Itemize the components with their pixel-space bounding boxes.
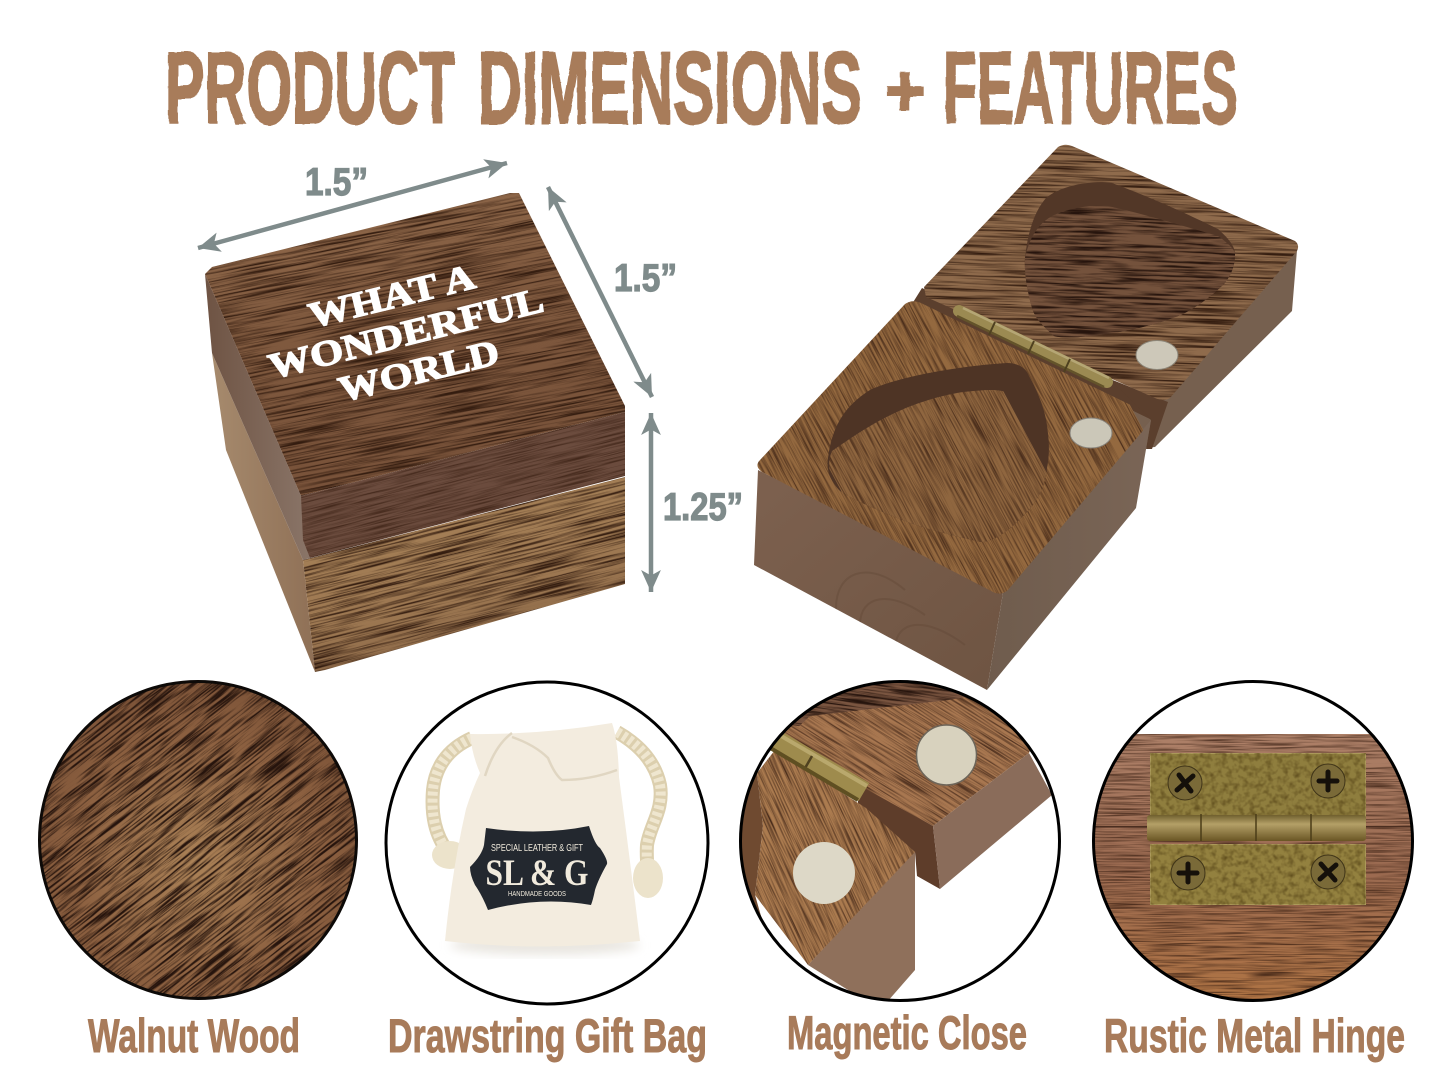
label: walnut wood: Walnut Wood bbox=[88, 1009, 300, 1062]
upper leaf bbox=[1150, 753, 1366, 817]
title bbox=[165, 31, 1238, 145]
back lid top bbox=[784, 697, 1030, 826]
engraved text: WHAT A bbox=[304, 256, 479, 336]
engraved text: WORLD bbox=[334, 332, 503, 410]
open wooden box bbox=[754, 144, 1298, 690]
dimension: width label: 1.5” bbox=[305, 161, 368, 204]
brass hinge bbox=[957, 308, 1109, 387]
back half side bbox=[912, 250, 1297, 449]
rope right bbox=[617, 732, 661, 882]
engraved text bbox=[264, 256, 548, 410]
hinge barrel bbox=[772, 738, 864, 792]
screw slots bbox=[1177, 772, 1337, 882]
title: DIMENSIONS bbox=[478, 31, 862, 145]
closed wooden box bbox=[131, 126, 689, 730]
title: + bbox=[885, 51, 925, 131]
dimension: width arrow bbox=[198, 163, 507, 248]
left cavity edge bbox=[742, 774, 763, 917]
box lid top bbox=[205, 193, 625, 496]
logo label bbox=[470, 826, 607, 910]
front half top bbox=[757, 301, 1144, 594]
box base front bbox=[303, 477, 625, 672]
bag folds bbox=[485, 733, 617, 780]
logo label: SPECIAL LEATHER & GIFT bbox=[491, 843, 583, 854]
hinge wood panel bbox=[1095, 734, 1411, 999]
front lid side bbox=[808, 850, 915, 1010]
front right side bbox=[987, 420, 1151, 690]
barrel bbox=[1147, 814, 1366, 841]
back lid outer side bbox=[933, 753, 1052, 889]
logo label: SL & G bbox=[486, 853, 588, 894]
back cavity bbox=[1024, 182, 1235, 338]
magnets bbox=[916, 725, 976, 785]
front cavity bbox=[828, 363, 1049, 542]
front left side bbox=[754, 470, 1003, 690]
rope left bbox=[433, 738, 472, 852]
dimension: depth arrow bbox=[548, 187, 652, 397]
label: magnetic close: Magnetic Close bbox=[787, 1006, 1027, 1059]
bag body bbox=[445, 723, 640, 946]
back half top bbox=[924, 144, 1298, 400]
front lid top bbox=[755, 752, 915, 965]
dimension: height label: 1.25” bbox=[663, 486, 743, 529]
label: drawstring gift bag: Drawstring Gift Bag bbox=[388, 1009, 707, 1062]
screws bbox=[1168, 764, 1345, 890]
title: PRODUCT bbox=[165, 31, 455, 145]
circle: magnetic close bbox=[739, 680, 1061, 1002]
box left side bbox=[205, 274, 315, 672]
circle: rustic metal hinge bbox=[1085, 682, 1425, 1009]
engraved text: WONDERFUL bbox=[264, 280, 548, 387]
box lid front bbox=[301, 412, 625, 558]
front magnet bbox=[1070, 418, 1112, 448]
lower leaf bbox=[1150, 844, 1366, 905]
back magnet bbox=[1136, 340, 1178, 370]
dimension: height arrow bbox=[649, 413, 653, 592]
circle: walnut wood bbox=[38, 680, 358, 1000]
rope knots bbox=[432, 841, 663, 898]
wood rings bbox=[835, 572, 922, 642]
logo label: HANDMADE GOODS bbox=[508, 889, 566, 898]
bag shadow bbox=[450, 935, 640, 955]
back lid dark inner side bbox=[858, 783, 940, 889]
back lid dark band bbox=[792, 683, 964, 726]
dimension: depth label: 1.5” bbox=[614, 257, 677, 300]
circle: drawstring gift bag bbox=[386, 682, 708, 1004]
